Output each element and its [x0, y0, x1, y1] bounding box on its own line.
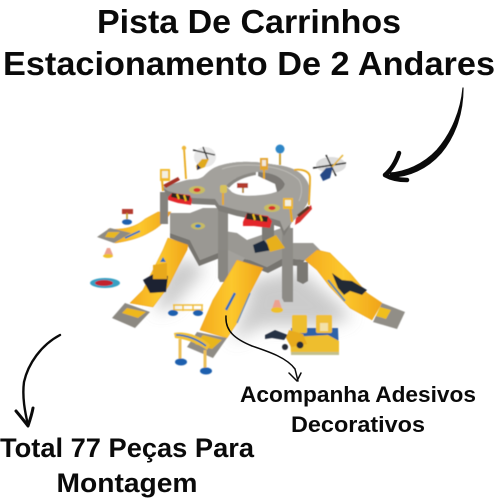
loose sign on left [122, 209, 133, 225]
title: Estacionamento De 2 Andares [3, 45, 495, 82]
traffic cone left [103, 248, 113, 258]
deck badges [189, 186, 205, 194]
toy excavator on ramp [143, 273, 168, 293]
red barriers [163, 177, 312, 228]
arrow: pointing to stickers [226, 316, 301, 381]
upper grey deck [162, 162, 310, 236]
caption: stickers: Acompanha Adesivos [240, 382, 476, 407]
lower grey deck [170, 208, 330, 273]
traffic cone right [271, 300, 283, 313]
title [3, 3, 495, 82]
caption: stickers [240, 382, 476, 437]
arrow: pointing to parts count [16, 335, 60, 426]
left front ramp [112, 238, 188, 328]
central hole [226, 172, 285, 196]
central ramp [187, 260, 263, 358]
floor shadow [155, 258, 352, 342]
support columns [160, 176, 308, 302]
signs and lamps [160, 144, 310, 222]
gas station diorama [265, 315, 339, 355]
round decal [90, 278, 120, 288]
excavator on upper level [253, 235, 285, 253]
title: Pista De Carrinhos [97, 3, 401, 40]
caption: parts count: Montagem [56, 468, 198, 498]
right ramp [305, 250, 405, 329]
arrow: pointing to helicopter [385, 88, 463, 180]
caption: stickers: Decorativos [291, 412, 425, 437]
entrance arch [174, 333, 212, 374]
toy parking playset [90, 144, 405, 374]
caption: parts count: Total 77 Peças Para [0, 433, 255, 463]
left back ramp [97, 212, 171, 243]
helicopter left [193, 147, 216, 170]
small fence [168, 305, 203, 316]
caption: parts count [0, 433, 255, 498]
helicopter right [313, 155, 346, 181]
